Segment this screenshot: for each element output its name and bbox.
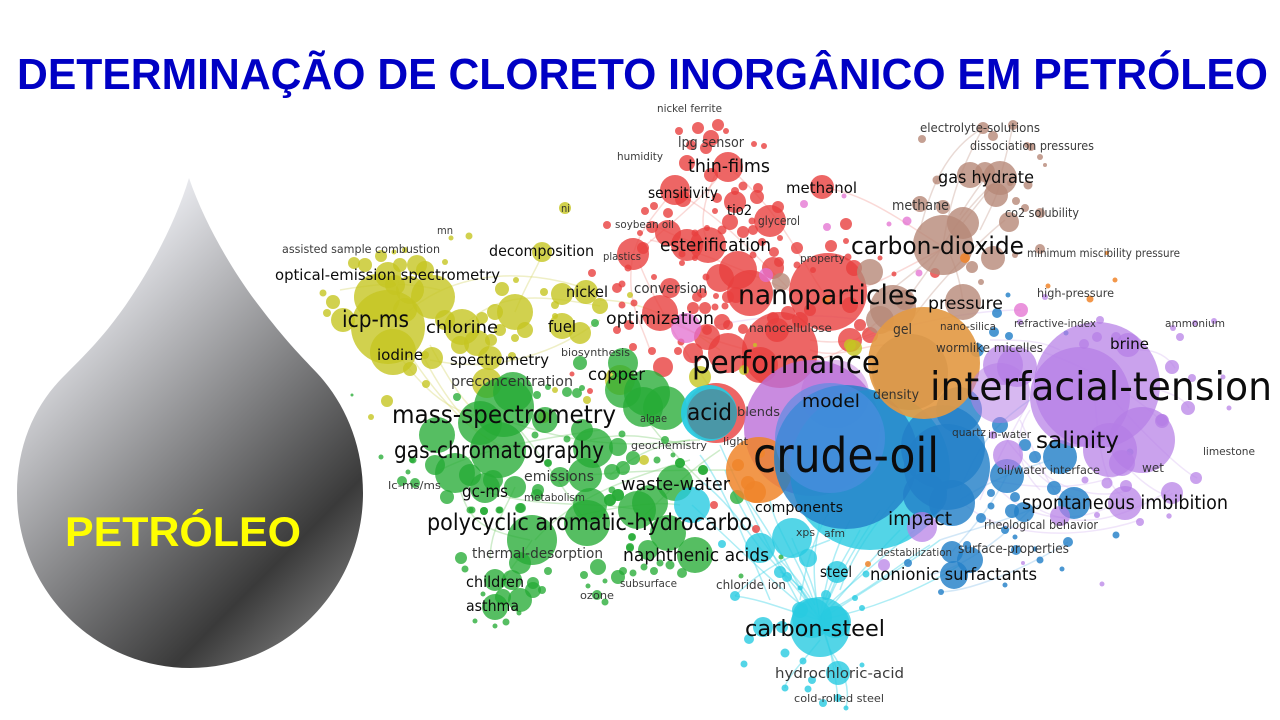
keyword labels: purple and blue clusters: ammonium <box>1165 318 1225 330</box>
keyword labels: purple and blue clusters: brine <box>1110 335 1149 353</box>
keyword labels: central and cyan clusters: model <box>802 391 860 412</box>
node: acid overlay <box>687 389 737 439</box>
network links <box>340 125 1197 708</box>
label: carbon-steel: carbon-steel <box>745 617 885 642</box>
cluster: red, nanomaterials <box>570 119 940 533</box>
keyword labels: central and cyan clusters: cold-rolled steel <box>794 693 884 705</box>
label: mass-spectrometry: mass-spectrometry <box>392 400 616 429</box>
keyword labels: red and brown clusters: thin-films <box>688 156 770 177</box>
keyword labels: red and brown clusters: lpg sensor <box>678 135 744 151</box>
keyword labels: red and brown clusters: methane <box>892 198 949 214</box>
keyword labels: central and cyan clusters: light <box>723 436 748 448</box>
keyword labels: green cluster: ozone <box>580 590 614 602</box>
keyword labels: yellow cluster: ni <box>561 203 570 215</box>
keyword labels: central and cyan clusters: impact <box>888 508 952 530</box>
cluster: purple, interfacial <box>878 294 1232 586</box>
cluster: yellow, atomic spectrometry <box>320 202 862 465</box>
label: performance: performance <box>692 345 880 381</box>
label: crude-oil: crude-oil <box>753 428 939 484</box>
keyword labels: purple and blue clusters: in-water <box>988 429 1032 441</box>
keyword labels: yellow cluster: nickel <box>566 283 608 301</box>
keyword labels: green cluster: gc-ms <box>462 482 508 502</box>
keyword labels: red and brown clusters <box>603 103 1180 381</box>
keyword labels: green cluster: algae <box>640 413 667 425</box>
label: polycyclic aromatic-hydrocarbo: polycyclic aromatic-hydrocarbo <box>427 510 752 536</box>
keyword labels: purple and blue clusters: nano-silica <box>940 321 996 333</box>
keyword labels: green cluster: thermal-desorption <box>472 546 603 562</box>
node: gel <box>868 307 980 419</box>
keyword labels: red and brown clusters: tio2 <box>727 203 752 219</box>
keyword labels: central and cyan clusters: xps <box>796 527 815 539</box>
keyword labels: green cluster: asthma <box>466 597 519 615</box>
keyword labels: green cluster <box>388 365 769 615</box>
keyword labels: red and brown clusters: nickel ferrite <box>657 103 722 115</box>
label: interfacial-tension: interfacial-tension <box>930 365 1272 410</box>
drop label: PETRÓLEO <box>65 507 301 555</box>
keyword labels: yellow cluster: spectrometry <box>450 351 549 369</box>
keyword labels: red and brown clusters: property <box>800 253 845 265</box>
keyword labels: central and cyan clusters: afm <box>824 528 845 540</box>
icon: petroleum drop <box>17 178 363 668</box>
keyword labels: yellow cluster: preconcentration <box>451 374 573 390</box>
keyword labels: red and brown clusters: nanocellulose <box>749 321 832 335</box>
keyword labels: green cluster: subsurface <box>620 578 677 590</box>
keyword labels: red and brown clusters: soybean oil <box>615 219 674 231</box>
keyword labels: red and brown clusters: minimum miscibility pressure <box>1027 246 1180 260</box>
keyword labels: red and brown clusters: humidity <box>617 151 663 163</box>
keyword labels: red and brown clusters: co2 solubility <box>1005 206 1079 220</box>
cluster: orange small <box>722 251 1118 567</box>
keyword labels: red and brown clusters: sensitivity <box>648 184 718 202</box>
network chart: keyword co-occurrence map <box>275 103 1272 710</box>
keyword labels: red and brown clusters: optimization <box>606 309 714 329</box>
keyword labels: green cluster: children <box>466 573 524 591</box>
keyword labels: red and brown clusters: pressure <box>928 294 1003 314</box>
keyword labels: red and brown clusters: conversion <box>634 281 707 297</box>
keyword labels: yellow cluster: iodine <box>377 346 423 364</box>
keyword labels: red and brown clusters: glycerol <box>758 214 800 228</box>
keyword labels: yellow cluster: optical-emission spectrometry <box>275 266 500 284</box>
keyword labels: central and cyan clusters: density <box>873 388 919 403</box>
cluster: brown, gas hydrates <box>772 120 1047 334</box>
title: DETERMINAÇÃO DE CLORETO INORGÂNICO EM PETRÓLEO <box>17 49 1268 99</box>
keyword labels: purple and blue clusters: oil/water interface <box>997 463 1100 477</box>
keyword labels: yellow cluster <box>275 203 630 390</box>
keyword labels: red and brown clusters: electrolyte-solutions <box>920 120 1040 135</box>
label: carbon-dioxide: carbon-dioxide <box>851 232 1024 260</box>
keyword labels: green cluster: emissions <box>524 469 594 485</box>
keyword labels: red and brown clusters: methanol <box>786 179 857 197</box>
keyword labels: purple and blue clusters: refractive-index <box>1014 318 1096 330</box>
keyword labels: green cluster: metabolism <box>524 492 585 504</box>
keyword labels: purple and blue clusters <box>870 318 1272 585</box>
keyword labels: purple and blue clusters: wormlike micelles <box>936 341 1043 355</box>
keyword labels: central and cyan clusters: gel <box>893 322 912 338</box>
keyword labels: central and cyan clusters <box>687 322 952 705</box>
keyword labels: yellow cluster: icp-ms <box>342 307 409 333</box>
keyword labels: yellow cluster: fuel <box>548 317 576 336</box>
keyword labels: central and cyan clusters: acid <box>687 400 732 426</box>
keyword labels: red and brown clusters: plastics <box>603 251 641 263</box>
keyword labels: red and brown clusters: gas hydrate <box>938 168 1034 188</box>
keyword labels: purple and blue clusters: spontaneous imbibition <box>1022 493 1228 514</box>
keyword labels: green cluster: copper <box>588 365 645 385</box>
keyword labels: central and cyan clusters: hydrochloric-acid <box>775 666 904 682</box>
keyword labels: purple and blue clusters: destabilization <box>877 547 952 559</box>
keyword labels: purple and blue clusters: nonionic surfactants <box>870 565 1037 585</box>
keyword labels: green cluster: naphthenic acids <box>623 545 769 566</box>
keyword labels: red and brown clusters: dissociation pressures <box>970 139 1094 153</box>
keyword labels: purple and blue clusters: quartz <box>952 427 986 439</box>
keyword labels: green cluster: waste-water <box>621 474 731 495</box>
keyword labels: purple and blue clusters: surface-properties <box>958 542 1069 557</box>
label: nanoparticles: nanoparticles <box>738 280 918 311</box>
keyword labels: central and cyan clusters: chloride ion <box>716 578 786 592</box>
keyword labels: yellow cluster: assisted sample combustion <box>282 242 440 256</box>
keyword labels: yellow cluster: biosynthesis <box>561 347 630 359</box>
cluster: magenta links node <box>671 194 1028 343</box>
node: performance <box>744 360 880 496</box>
keyword labels: yellow cluster: mn <box>437 225 453 237</box>
keyword labels: purple and blue clusters: rheological behavior <box>984 518 1098 532</box>
keyword labels: yellow cluster: decomposition <box>489 242 594 260</box>
keyword labels: red and brown clusters: esterification <box>660 235 771 256</box>
keyword labels: purple and blue clusters: wet <box>1142 461 1164 475</box>
cluster: cyan, corrosion <box>674 385 950 710</box>
keyword labels: green cluster: geochemistry <box>631 440 707 452</box>
keyword labels: central and cyan clusters: steel <box>820 563 852 581</box>
keyword labels: central and cyan clusters: components <box>755 500 843 516</box>
label: gas-chromatography: gas-chromatography <box>394 438 604 464</box>
keyword labels: purple and blue clusters: salinity <box>1036 428 1119 454</box>
keyword labels: central and cyan clusters: blends <box>737 405 780 419</box>
keyword labels: green cluster: lc-ms/ms <box>388 479 441 492</box>
cluster: blue, emulsions <box>774 292 1134 595</box>
keyword labels: yellow cluster: chlorine <box>426 318 498 338</box>
keyword labels: purple and blue clusters: limestone <box>1203 446 1255 458</box>
cluster: green, chromatography <box>350 319 784 628</box>
keyword labels: red and brown clusters: high-pressure <box>1037 286 1114 300</box>
